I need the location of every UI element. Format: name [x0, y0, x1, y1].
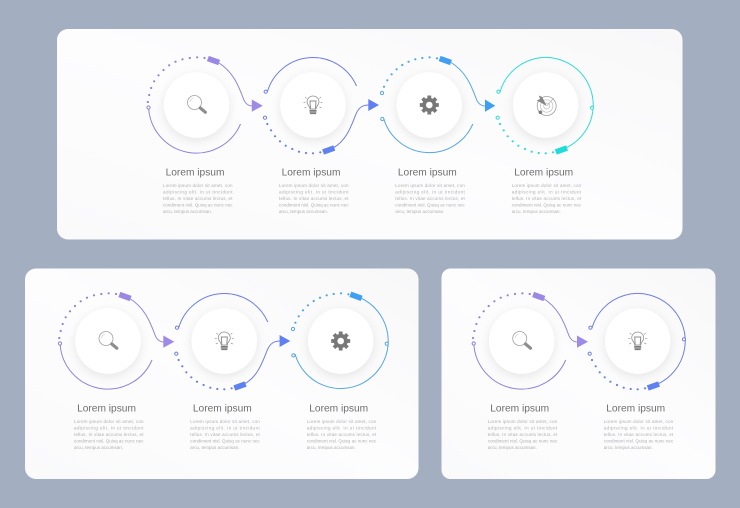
step 1: search: adipiscing elit. In ut tincidunt — [163, 190, 233, 194]
step 1: search: arcu, tempus accumsan. — [74, 445, 123, 450]
step 3: settings: tellus. In vitae accums lectus, et — [395, 196, 466, 201]
step 1: search: tellus. In vitae accums lectus, et — [163, 196, 233, 201]
step 3: settings: arcu, tempus accumsan. — [307, 445, 356, 450]
step 2: idea: arcu, tempus accumsan. — [604, 445, 653, 450]
step 2: idea: Lorem ipsum — [282, 168, 340, 178]
step 2: idea: Lorem ipsum dolor sit amet, con — [279, 183, 349, 188]
step 2: idea: tellus. In vitae accums lectus, et — [190, 432, 261, 437]
step 1: search: condiment nisl. Quisq ac nunc nec — [488, 438, 558, 444]
step 2: idea — [263, 58, 379, 214]
step 3: settings: arcu, tempus accumsan. — [395, 209, 444, 214]
step 2: idea — [175, 294, 290, 450]
step 3: settings: tellus. In vitae accums lectus, et — [307, 432, 377, 437]
step 2: idea: condiment nisl. Quisq ac nunc nec — [190, 438, 261, 444]
step 1: search — [58, 292, 174, 450]
step 3: settings — [380, 56, 495, 214]
step 4: target: Lorem ipsum — [514, 168, 573, 178]
step 1: search: condiment nisl. Quisq ac nunc nec — [163, 202, 233, 208]
step 3: settings — [291, 292, 388, 450]
step 4: target: tellus. In vitae accums lectus, et — [512, 196, 582, 201]
step 3: settings: condiment nisl. Quisq ac nunc nec — [307, 438, 377, 444]
step 4: target: Lorem ipsum dolor sit amet, con — [512, 183, 582, 188]
step 4: target — [496, 57, 594, 214]
step 3: settings: Lorem ipsum — [309, 404, 368, 414]
step 4: target: arcu, tempus accumsan. — [512, 209, 561, 214]
step 4: target: condiment nisl. Quisq ac nunc nec — [512, 202, 582, 208]
step 1: search — [472, 292, 588, 450]
panel: four step timeline — [57, 29, 682, 240]
step 1: search: tellus. In vitae accums lectus, et — [488, 432, 558, 437]
step 4: target: adipiscing elit. In ut tincidunt — [512, 190, 582, 194]
step 2: idea: arcu, tempus accumsan. — [279, 209, 328, 214]
step 3: settings: adipiscing elit. In ut tincidunt — [307, 426, 377, 430]
step 1: search: Lorem ipsum dolor sit amet, con — [163, 183, 233, 188]
step 1: search: Lorem ipsum dolor sit amet, con — [488, 419, 558, 424]
step 1: search: Lorem ipsum — [490, 404, 549, 414]
step 2: idea: Lorem ipsum — [606, 404, 665, 414]
step 1: search — [147, 56, 263, 214]
step 1: search: adipiscing elit. In ut tincidunt — [74, 426, 144, 430]
step 1: search: arcu, tempus accumsan. — [163, 209, 212, 214]
step 2: idea: adipiscing elit. In ut tincidunt — [604, 426, 674, 430]
step 1: search: adipiscing elit. In ut tincidunt — [488, 426, 558, 430]
step 1: search: Lorem ipsum — [77, 404, 136, 414]
step 2: idea: condiment nisl. Quisq ac nunc nec — [279, 202, 349, 208]
panel: three step timeline — [25, 268, 418, 479]
step 1: search: condiment nisl. Quisq ac nunc nec — [74, 438, 144, 444]
step 2: idea: adipiscing elit. In ut tincidunt — [279, 190, 349, 194]
step 1: search: tellus. In vitae accums lectus, et — [74, 432, 144, 437]
panel: two step timeline — [442, 268, 716, 479]
step 3: settings: adipiscing elit. In ut tincidunt — [395, 190, 466, 194]
step 2: idea: adipiscing elit. In ut tincidunt — [190, 426, 261, 430]
step 3: settings: Lorem ipsum — [398, 168, 457, 178]
step 1: search: Lorem ipsum dolor sit amet, con — [74, 419, 144, 424]
step 2: idea — [588, 293, 686, 450]
step 2: idea: Lorem ipsum dolor sit amet, con — [604, 419, 674, 424]
step 2: idea: tellus. In vitae accums lectus, et — [604, 432, 674, 437]
step 1: search: Lorem ipsum — [166, 168, 224, 178]
step 1: search: arcu, tempus accumsan. — [488, 445, 537, 450]
step 2: idea: arcu, tempus accumsan. — [190, 445, 239, 450]
step 2: idea: tellus. In vitae accums lectus, et — [279, 196, 349, 201]
step 3: settings: Lorem ipsum dolor sit amet, con — [307, 419, 377, 424]
step 3: settings: Lorem ipsum dolor sit amet, con — [395, 183, 465, 188]
step 2: idea: condiment nisl. Quisq ac nunc nec — [604, 438, 674, 444]
step 3: settings: condiment nisl. Quisq ac nunc nec — [395, 202, 466, 208]
step 2: idea: Lorem ipsum — [193, 404, 252, 414]
step 2: idea: Lorem ipsum dolor sit amet, con — [190, 419, 260, 424]
